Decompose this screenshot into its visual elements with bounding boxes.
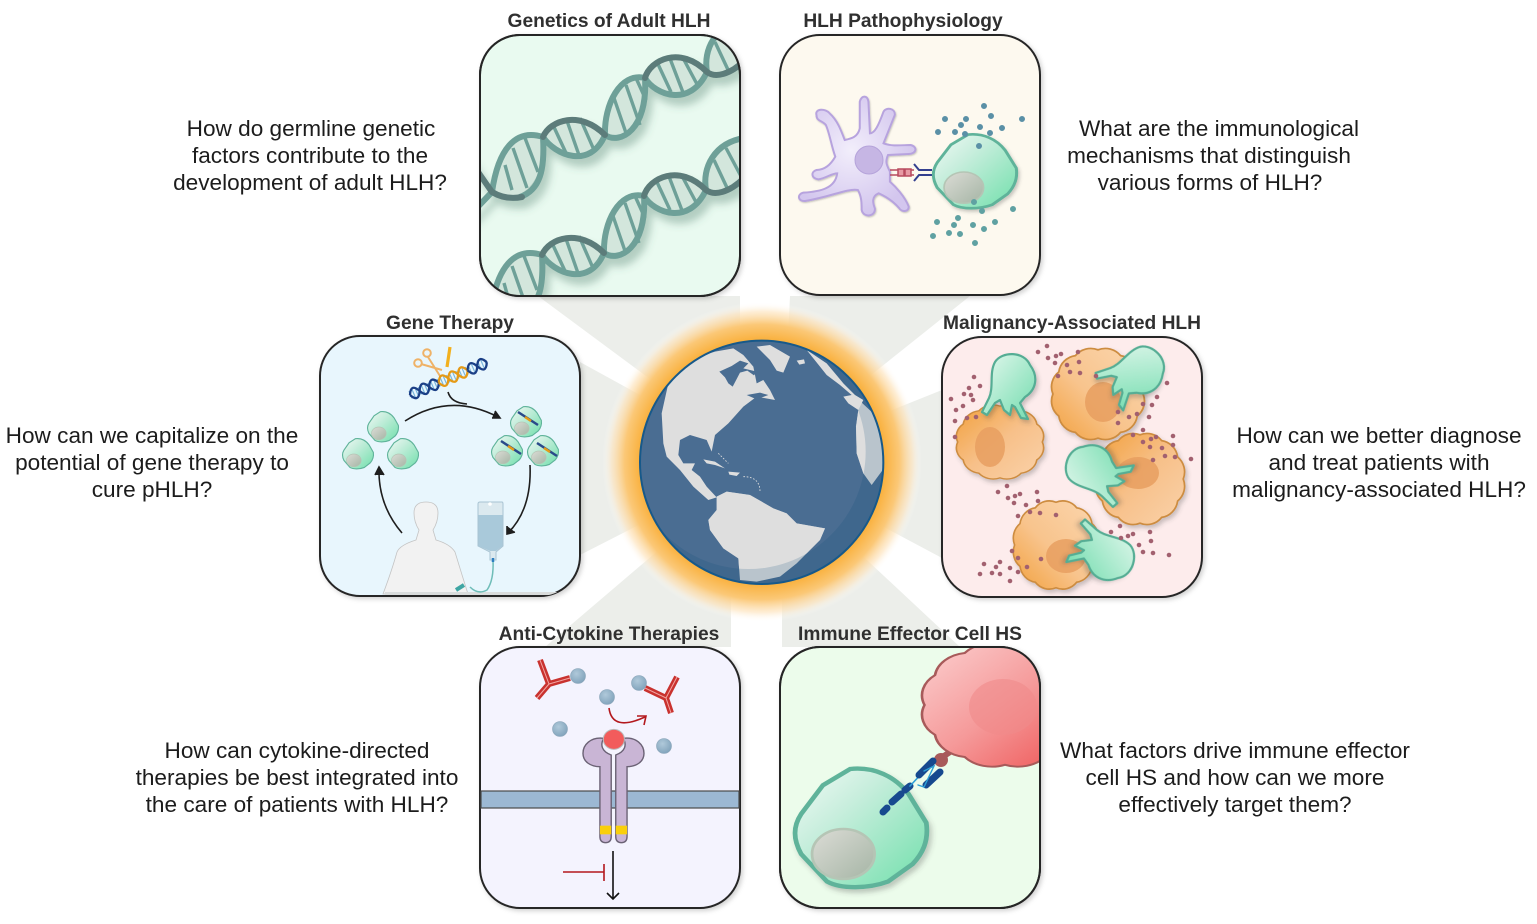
panel: anti-cytokine therapies (480, 624, 740, 908)
panel background (780, 35, 1040, 295)
icon: edited cells (491, 407, 559, 466)
panel background (780, 647, 1040, 908)
panel: genetics of adult HLH (479, 13, 745, 301)
globe (631, 334, 883, 584)
heading: Gene Therapy (386, 313, 514, 334)
icon: IV bag (478, 502, 503, 562)
panel background (320, 336, 580, 596)
icon: line to arm (470, 560, 493, 592)
panel: HLH pathophysiology (780, 11, 1040, 295)
cytokine dots (951, 346, 1191, 581)
question: malignancy-associated HLH: malignancy-associated HLH? (1232, 477, 1526, 502)
glow around globe (602, 302, 922, 622)
icon: target cell (920, 648, 1039, 768)
panel background (480, 35, 740, 296)
icon: CAR receptor (883, 761, 940, 812)
question: gene therapy: cure pHLH? (92, 477, 212, 502)
icon: T cell (933, 134, 1017, 208)
question: cytokine-directed therapies: the care of patients with HLH? (146, 792, 448, 817)
icon: DNA editing strand (410, 359, 487, 398)
arrows: treatment cycle (375, 392, 530, 534)
icon: malignant cells (956, 348, 1185, 589)
question: adult HLH genetics: factors contribute to the (192, 143, 428, 168)
question: immune effector cell HS: effectively target them? (1118, 792, 1352, 817)
question: malignancy-associated HLH: How can we better diagnose (1236, 423, 1522, 448)
panel background (942, 337, 1202, 597)
icon: scissors (414, 349, 442, 376)
icon: effector T cell (795, 769, 927, 887)
inhibitor mark (563, 864, 604, 881)
icon: dendritic cell (799, 97, 915, 215)
question: gene therapy: potential of gene therapy to (15, 450, 289, 475)
question: adult HLH genetics: development of adult HLH? (173, 170, 447, 195)
question: cytokine-directed therapies: How can cytokine-directed (165, 738, 429, 763)
question: malignancy-associated HLH: and treat patients with (1268, 450, 1490, 475)
question: gene therapy: How can we capitalize on the (6, 423, 298, 448)
panel: malignancy-associated HLH (942, 313, 1202, 597)
icon: pen (447, 347, 450, 367)
question: immunological mechanisms: What are the immunological (1079, 116, 1359, 141)
icon: receptor ligand interaction (890, 164, 932, 181)
cytokine dots lower (933, 202, 1013, 243)
icon: cytokine receptor (583, 729, 644, 843)
icon: arm connector (456, 585, 464, 590)
heading: Malignancy-Associated HLH (943, 313, 1201, 334)
icon: malignant cell nuclei (975, 382, 1159, 573)
question: immunological mechanisms: various forms of HLH? (1098, 170, 1322, 195)
question: immune effector cell HS: cell HS and how can we more (1086, 765, 1384, 790)
heading: Immune Effector Cell HS (798, 624, 1022, 645)
icon: antibodies (537, 660, 677, 713)
panel: gene therapy (320, 313, 580, 596)
icon: unedited cells (342, 412, 419, 469)
heading: HLH Pathophysiology (803, 11, 1003, 32)
question: immunological mechanisms: mechanisms that distinguish (1067, 143, 1351, 168)
membrane (481, 791, 739, 808)
background beams radiating from globe (538, 296, 970, 647)
arrow: signalling (607, 851, 619, 899)
icon: free cytokines (552, 668, 672, 754)
heading: Genetics of Adult HLH (508, 11, 710, 32)
illustration: DNA double helices (481, 38, 739, 295)
panel: immune effector cell HS (779, 626, 1045, 913)
heading: Anti-Cytokine Therapies (499, 624, 719, 645)
icon: dendritic cell nucleus (855, 146, 883, 174)
question: adult HLH genetics: How do germline genetic (187, 116, 435, 141)
panel background (480, 647, 740, 908)
question: cytokine-directed therapies: therapies be best integrated into (136, 765, 458, 790)
icon: effector cells (982, 332, 1174, 586)
question: immune effector cell HS: What factors drive immune effector (1060, 738, 1410, 763)
icon: patient (383, 502, 565, 595)
cytokine dots (938, 106, 1022, 146)
arrow: red curved (609, 708, 646, 725)
